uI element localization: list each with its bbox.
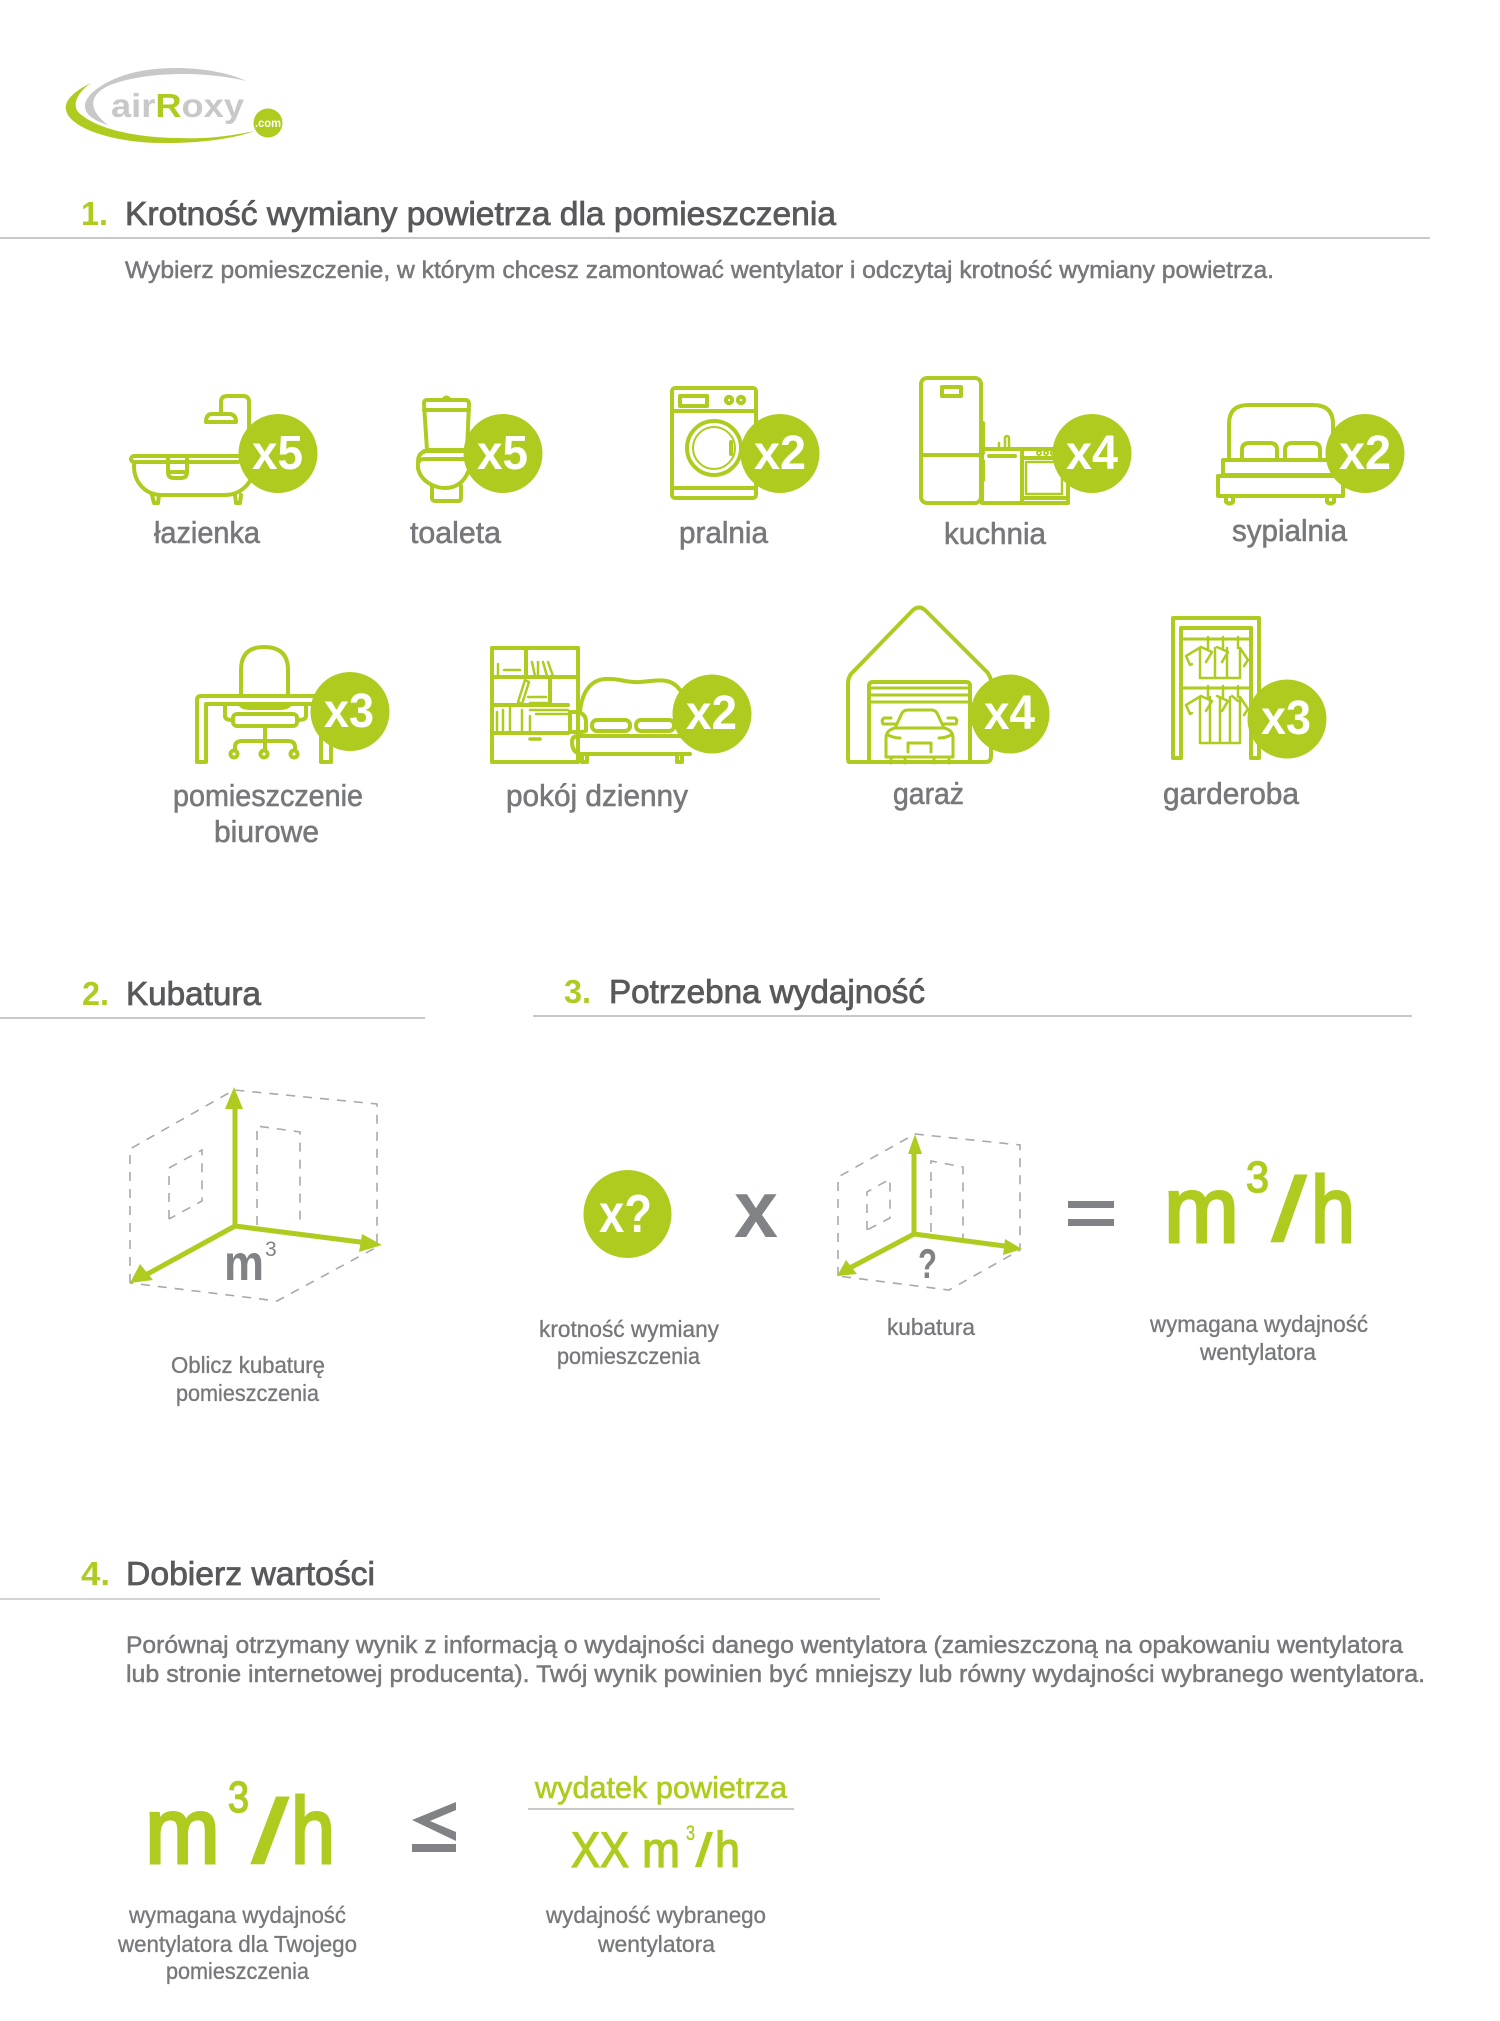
section 4 text: lub stronie internetowej producenta). Twój wynik powinien być mniejszy lub równy wydajności wybranego wentylatora. [126, 1661, 1425, 1688]
comparison: fan spec label [528, 1770, 794, 1878]
caption: wydajność wybranego wentylatora [545, 1902, 766, 1957]
icon: washing machine [672, 388, 756, 498]
room: garderoba x3 [1163, 618, 1326, 811]
comparison: fan spec label: XX [571, 1822, 629, 1878]
room: pralnia x2: pralnia [679, 515, 769, 550]
caption: krotność wymiany: krotność wymiany [539, 1316, 719, 1342]
caption: krotność wymiany [539, 1316, 719, 1369]
comparison: fan spec label: 3 [686, 1822, 695, 1845]
icon: bathtub [131, 396, 254, 503]
caption: wymagana wydajność wentylatora dla Twojego pomieszczenia: pomieszczenia [166, 1958, 310, 1984]
icon: kitchen [921, 378, 1068, 503]
logo: airRoxy: .com [255, 116, 281, 130]
caption: wydajność wybranego wentylatora: wydajność wybranego [545, 1902, 766, 1928]
section 2 heading: 2. [82, 975, 109, 1012]
comparison: required unit: h [291, 1778, 335, 1883]
caption: wymagana wydajność: wymagana wydajność [1149, 1311, 1368, 1337]
room: toaleta x5: x5 [477, 427, 528, 480]
room: pokój dzienny x2: pokój dzienny [506, 778, 688, 813]
room: pokój dzienny x2: x2 [686, 687, 737, 740]
room: łazienka x5: łazienka [154, 515, 261, 550]
section 1 heading [0, 195, 1430, 239]
comparison: required unit [145, 1773, 335, 1883]
caption: wymagana wydajność: wentylatora [1199, 1339, 1317, 1365]
room: łazienka x5: x5 [252, 427, 303, 480]
chart: room volume diagram [130, 1087, 382, 1301]
comparison: fan spec label: h [715, 1822, 740, 1878]
section 4 text [126, 1632, 1425, 1688]
logo: airRoxy: airRoxy [111, 87, 245, 124]
formula: result unit: h [1311, 1157, 1355, 1262]
caption: oblicz kubaturę: pomieszczenia [176, 1380, 320, 1406]
icon: bed [1218, 405, 1343, 504]
room: garaż x4: garaż [893, 776, 964, 811]
chart: room volume diagram: m [224, 1235, 264, 1291]
room: pralnia x2: x2 [754, 427, 806, 480]
icon: desk with chair [197, 647, 331, 762]
comparison: required unit: 3 [228, 1773, 249, 1822]
caption: oblicz kubaturę: Oblicz kubaturę [171, 1352, 325, 1378]
formula: result unit: 3 [1246, 1153, 1269, 1202]
chart: room volume diagram: 3 [265, 1238, 277, 1261]
section 2 heading: Kubatura [126, 975, 262, 1012]
comparison: required unit: / [253, 1782, 288, 1881]
caption: wymagana wydajność [1149, 1311, 1368, 1365]
formula: result unit: / [1273, 1160, 1306, 1259]
icon: bookshelf and sofa [492, 648, 690, 762]
formula: volume diagram: ? [918, 1240, 937, 1287]
room: sypialnia x2 [1218, 405, 1404, 548]
comparison: required unit: m [145, 1778, 220, 1883]
section 1 intro text: Wybierz pomieszczenie, w którym chcesz zamontować wentylator i odczytaj krotność wymiany powietrza. [125, 257, 1274, 284]
room: pokój dzienny x2 [492, 648, 752, 813]
section 2 heading [0, 975, 425, 1019]
room: garaż x4: x4 [984, 687, 1035, 740]
logo: airRoxy [66, 68, 283, 143]
formula: multiplier badge [584, 1170, 672, 1258]
label: pomieszczenie biurowe [173, 778, 363, 849]
section 3 heading: Potrzebna wydajność [609, 973, 925, 1010]
room: toaleta x5 [410, 398, 542, 550]
section 4 heading: 4. [81, 1555, 110, 1592]
room: kuchnia x4: kuchnia [944, 516, 1047, 551]
formula: multiplier badge: x? [599, 1184, 652, 1244]
room: pomieszczenie biurowe x3 [173, 647, 390, 849]
section 4 heading [0, 1555, 880, 1600]
room: sypialnia x2: sypialnia [1232, 513, 1348, 548]
section 1 heading: 1. [81, 195, 108, 232]
formula: multiply sign: x [734, 1165, 778, 1255]
comparison: fan spec label: m [642, 1822, 680, 1878]
room: garderoba x3: garderoba [1163, 776, 1300, 811]
section 3 heading [533, 973, 1412, 1017]
room: garaż x4 [848, 608, 1050, 811]
label: pomieszczenie biurowe: biurowe [214, 814, 319, 849]
formula: equals sign [1068, 1201, 1114, 1226]
comparison: fan spec label: / [696, 1824, 712, 1876]
formula: volume diagram [837, 1134, 1022, 1290]
caption: wymagana wydajność wentylatora dla Twojego pomieszczenia: wymagana wydajność [128, 1902, 346, 1928]
comparison: fan spec label: wydatek powietrza [534, 1770, 788, 1805]
icon: toilet [418, 398, 470, 501]
room: pomieszczenie biurowe x3: x3 [324, 685, 374, 738]
caption: wymagana wydajność wentylatora dla Twojego pomieszczenia [117, 1902, 357, 1984]
room: pralnia x2 [672, 388, 820, 550]
caption: kubatura: kubatura [887, 1314, 976, 1340]
icon: garage with car [848, 608, 991, 763]
room: kuchnia x4: x4 [1066, 427, 1118, 480]
room: toaleta x5: toaleta [410, 515, 502, 550]
caption: wydajność wybranego wentylatora: wentylatora [597, 1931, 716, 1957]
room: sypialnia x2: x2 [1339, 427, 1391, 480]
room: łazienka x5 [131, 396, 318, 550]
section 4 text: Porównaj otrzymany wynik z informacją o wydajności danego wentylatora (zamieszczoną na opakowaniu wentylatora [126, 1632, 1403, 1659]
caption: oblicz kubaturę [171, 1352, 325, 1406]
caption: wymagana wydajność wentylatora dla Twojego pomieszczenia: wentylatora dla Twojego [117, 1931, 357, 1957]
formula: result unit [1164, 1153, 1355, 1262]
section 3 heading: 3. [564, 973, 591, 1010]
room: kuchnia x4 [921, 378, 1132, 551]
comparison: less-or-equal sign [412, 1802, 456, 1852]
room: garderoba x3: x3 [1261, 692, 1311, 745]
section 4 heading: Dobierz wartości [126, 1555, 375, 1592]
label: pomieszczenie biurowe: pomieszczenie [173, 778, 363, 813]
section 1 heading: Krotność wymiany powietrza dla pomieszczenia [125, 195, 837, 232]
caption: krotność wymiany: pomieszczenia [557, 1343, 701, 1369]
formula: result unit: m [1164, 1157, 1239, 1262]
icon: wardrobe with shirts [1173, 618, 1259, 758]
